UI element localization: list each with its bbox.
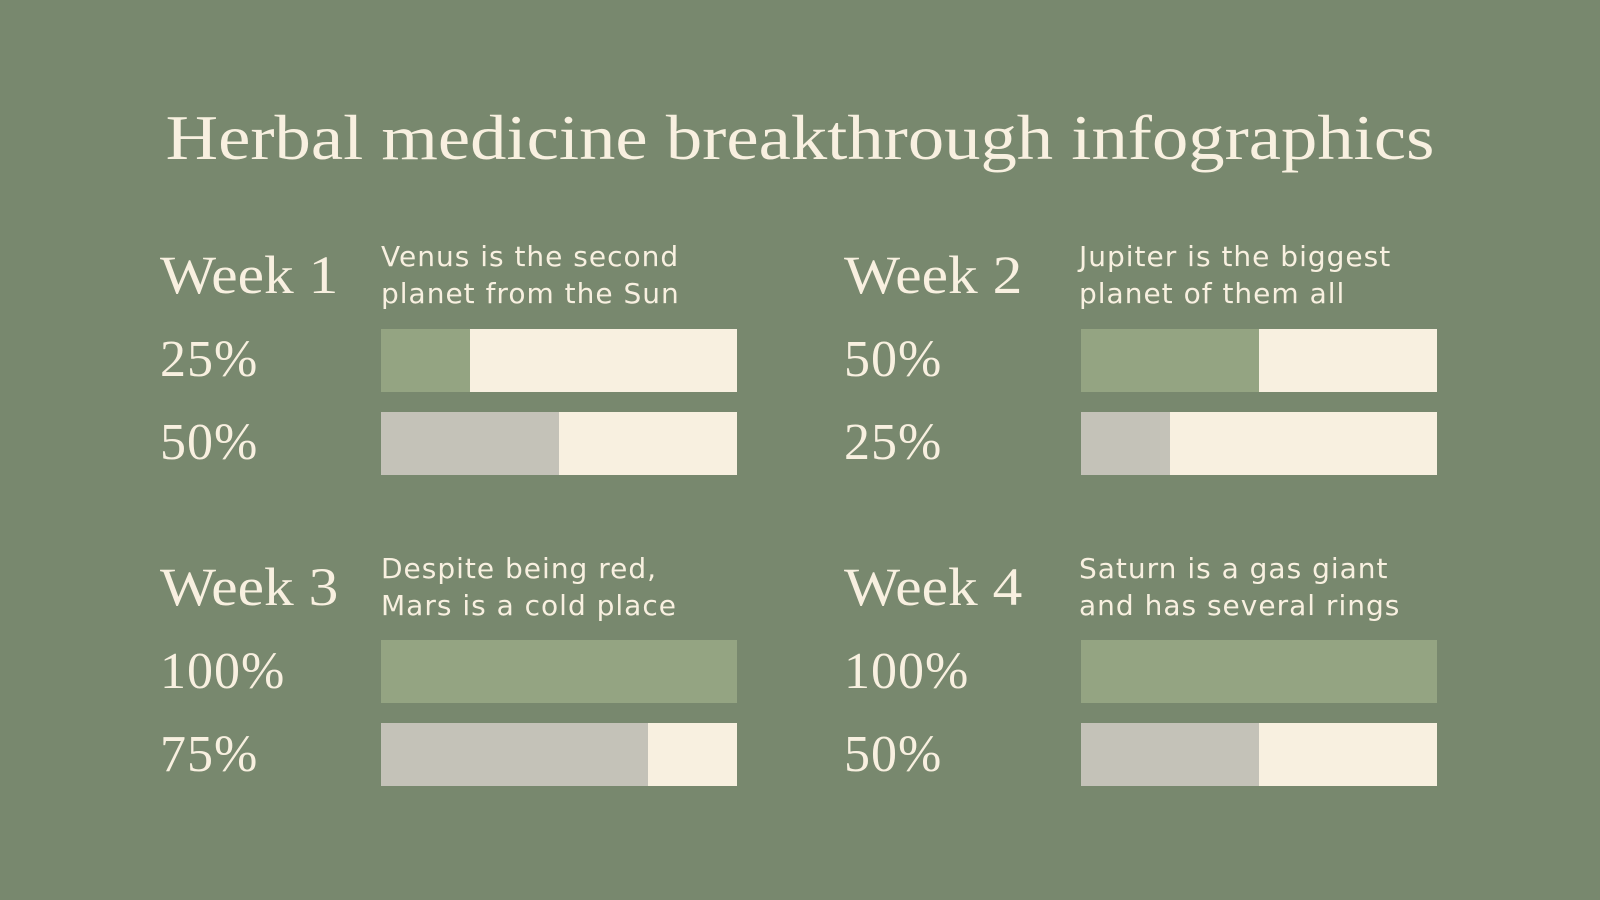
bar 25%	[381, 329, 737, 392]
label 25%: 25%	[160, 331, 258, 388]
heading: week 2: Week 2	[844, 245, 1022, 305]
label 50%: 50%	[844, 726, 942, 783]
label 75%: 75%	[160, 726, 258, 783]
bar 50%	[1081, 329, 1437, 392]
description: week 3: Despite being red,	[381, 552, 657, 585]
description: week 2: planet of them all	[1079, 277, 1345, 310]
bar 25%	[1081, 412, 1437, 475]
description: week 4	[1079, 552, 1400, 622]
label 100%: 100%	[844, 643, 969, 700]
bar 100%	[381, 640, 737, 703]
description: week 3: Mars is a cold place	[381, 589, 677, 622]
bar 75%	[381, 723, 737, 786]
description: week 1: planet from the Sun	[381, 277, 680, 310]
description: week 2	[1078, 240, 1391, 310]
label 25%: 25%	[844, 414, 942, 471]
label 50%: 50%	[844, 331, 942, 388]
bar 50%	[1081, 723, 1437, 786]
heading: week 3: Week 3	[160, 557, 338, 617]
description: week 4: and has several rings	[1079, 589, 1400, 622]
panel: week 3	[160, 552, 737, 786]
title: Herbal medicine breakthrough infographics	[166, 102, 1434, 173]
label 100%: 100%	[160, 643, 285, 700]
heading: week 1: Week 1	[160, 245, 338, 305]
heading: week 4: Week 4	[844, 557, 1022, 617]
bar 50%	[381, 412, 737, 475]
panel: week 1	[160, 240, 737, 475]
label 50%: 50%	[160, 414, 258, 471]
description: week 4: Saturn is a gas giant	[1079, 552, 1389, 585]
bar 100%	[1081, 640, 1437, 703]
description: week 2: Jupiter is the biggest	[1079, 240, 1391, 273]
panel: week 4	[844, 552, 1437, 786]
description: week 1: Venus is the second	[381, 240, 679, 273]
description: week 3	[381, 552, 677, 622]
panel: week 2	[844, 240, 1437, 475]
description: week 1	[381, 240, 680, 310]
